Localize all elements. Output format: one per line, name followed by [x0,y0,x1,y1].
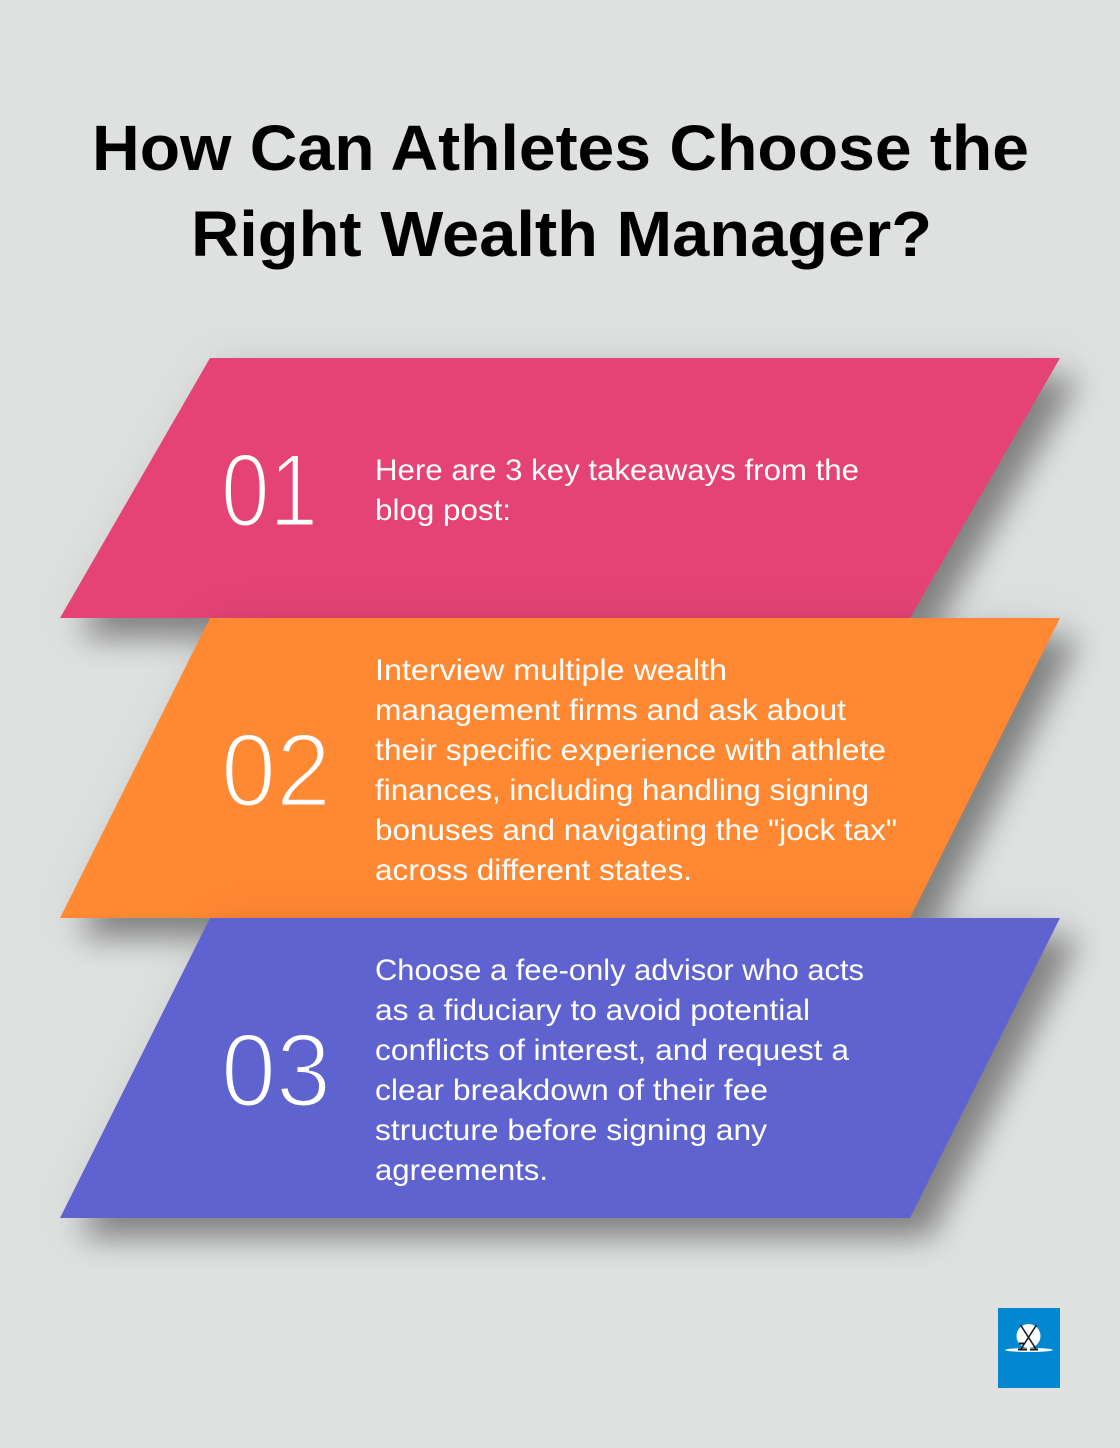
text: step 03: structure before signing any [375,1114,767,1147]
text: step 02: their specific experience with athlete [375,734,886,767]
text: step 02: management firms and ask about [375,694,847,727]
pink parallelogram [60,358,1060,618]
title: How Can Athletes Choose the [92,112,1029,184]
purple parallelogram [60,918,1060,1218]
text: step 03: agreements. [375,1154,548,1187]
text: step 02: finances, including handling signing [375,774,869,807]
panel: step 01 [60,358,1060,618]
panel: step 02 [60,618,1060,918]
number 03: 03 [221,1013,331,1129]
text: step 01: blog post: [375,494,511,527]
text: step 01 [375,454,859,527]
text: step 03: clear breakdown of their fee [375,1074,768,1107]
text: step 02: Interview multiple wealth [375,654,727,687]
icon: hockey sticks logo [998,1308,1060,1388]
text: step 02: bonuses and navigating the "jock tax" [375,814,897,847]
text: step 03: Choose a fee-only advisor who acts [375,954,864,987]
orange parallelogram [60,618,1060,918]
text: step 03 [375,954,864,1187]
text: step 02: across different states. [375,854,692,887]
number 01: 01 [221,433,318,549]
text: step 02 [375,654,897,887]
title: Right Wealth Manager? [191,198,932,270]
number 02: 02 [221,713,331,829]
text: step 03: conflicts of interest, and request a [375,1034,849,1067]
text: step 01: Here are 3 key takeaways from the [375,454,859,487]
text: step 03: as a fiduciary to avoid potential [375,994,810,1027]
panel: step 03 [60,918,1060,1218]
title [92,112,1029,270]
